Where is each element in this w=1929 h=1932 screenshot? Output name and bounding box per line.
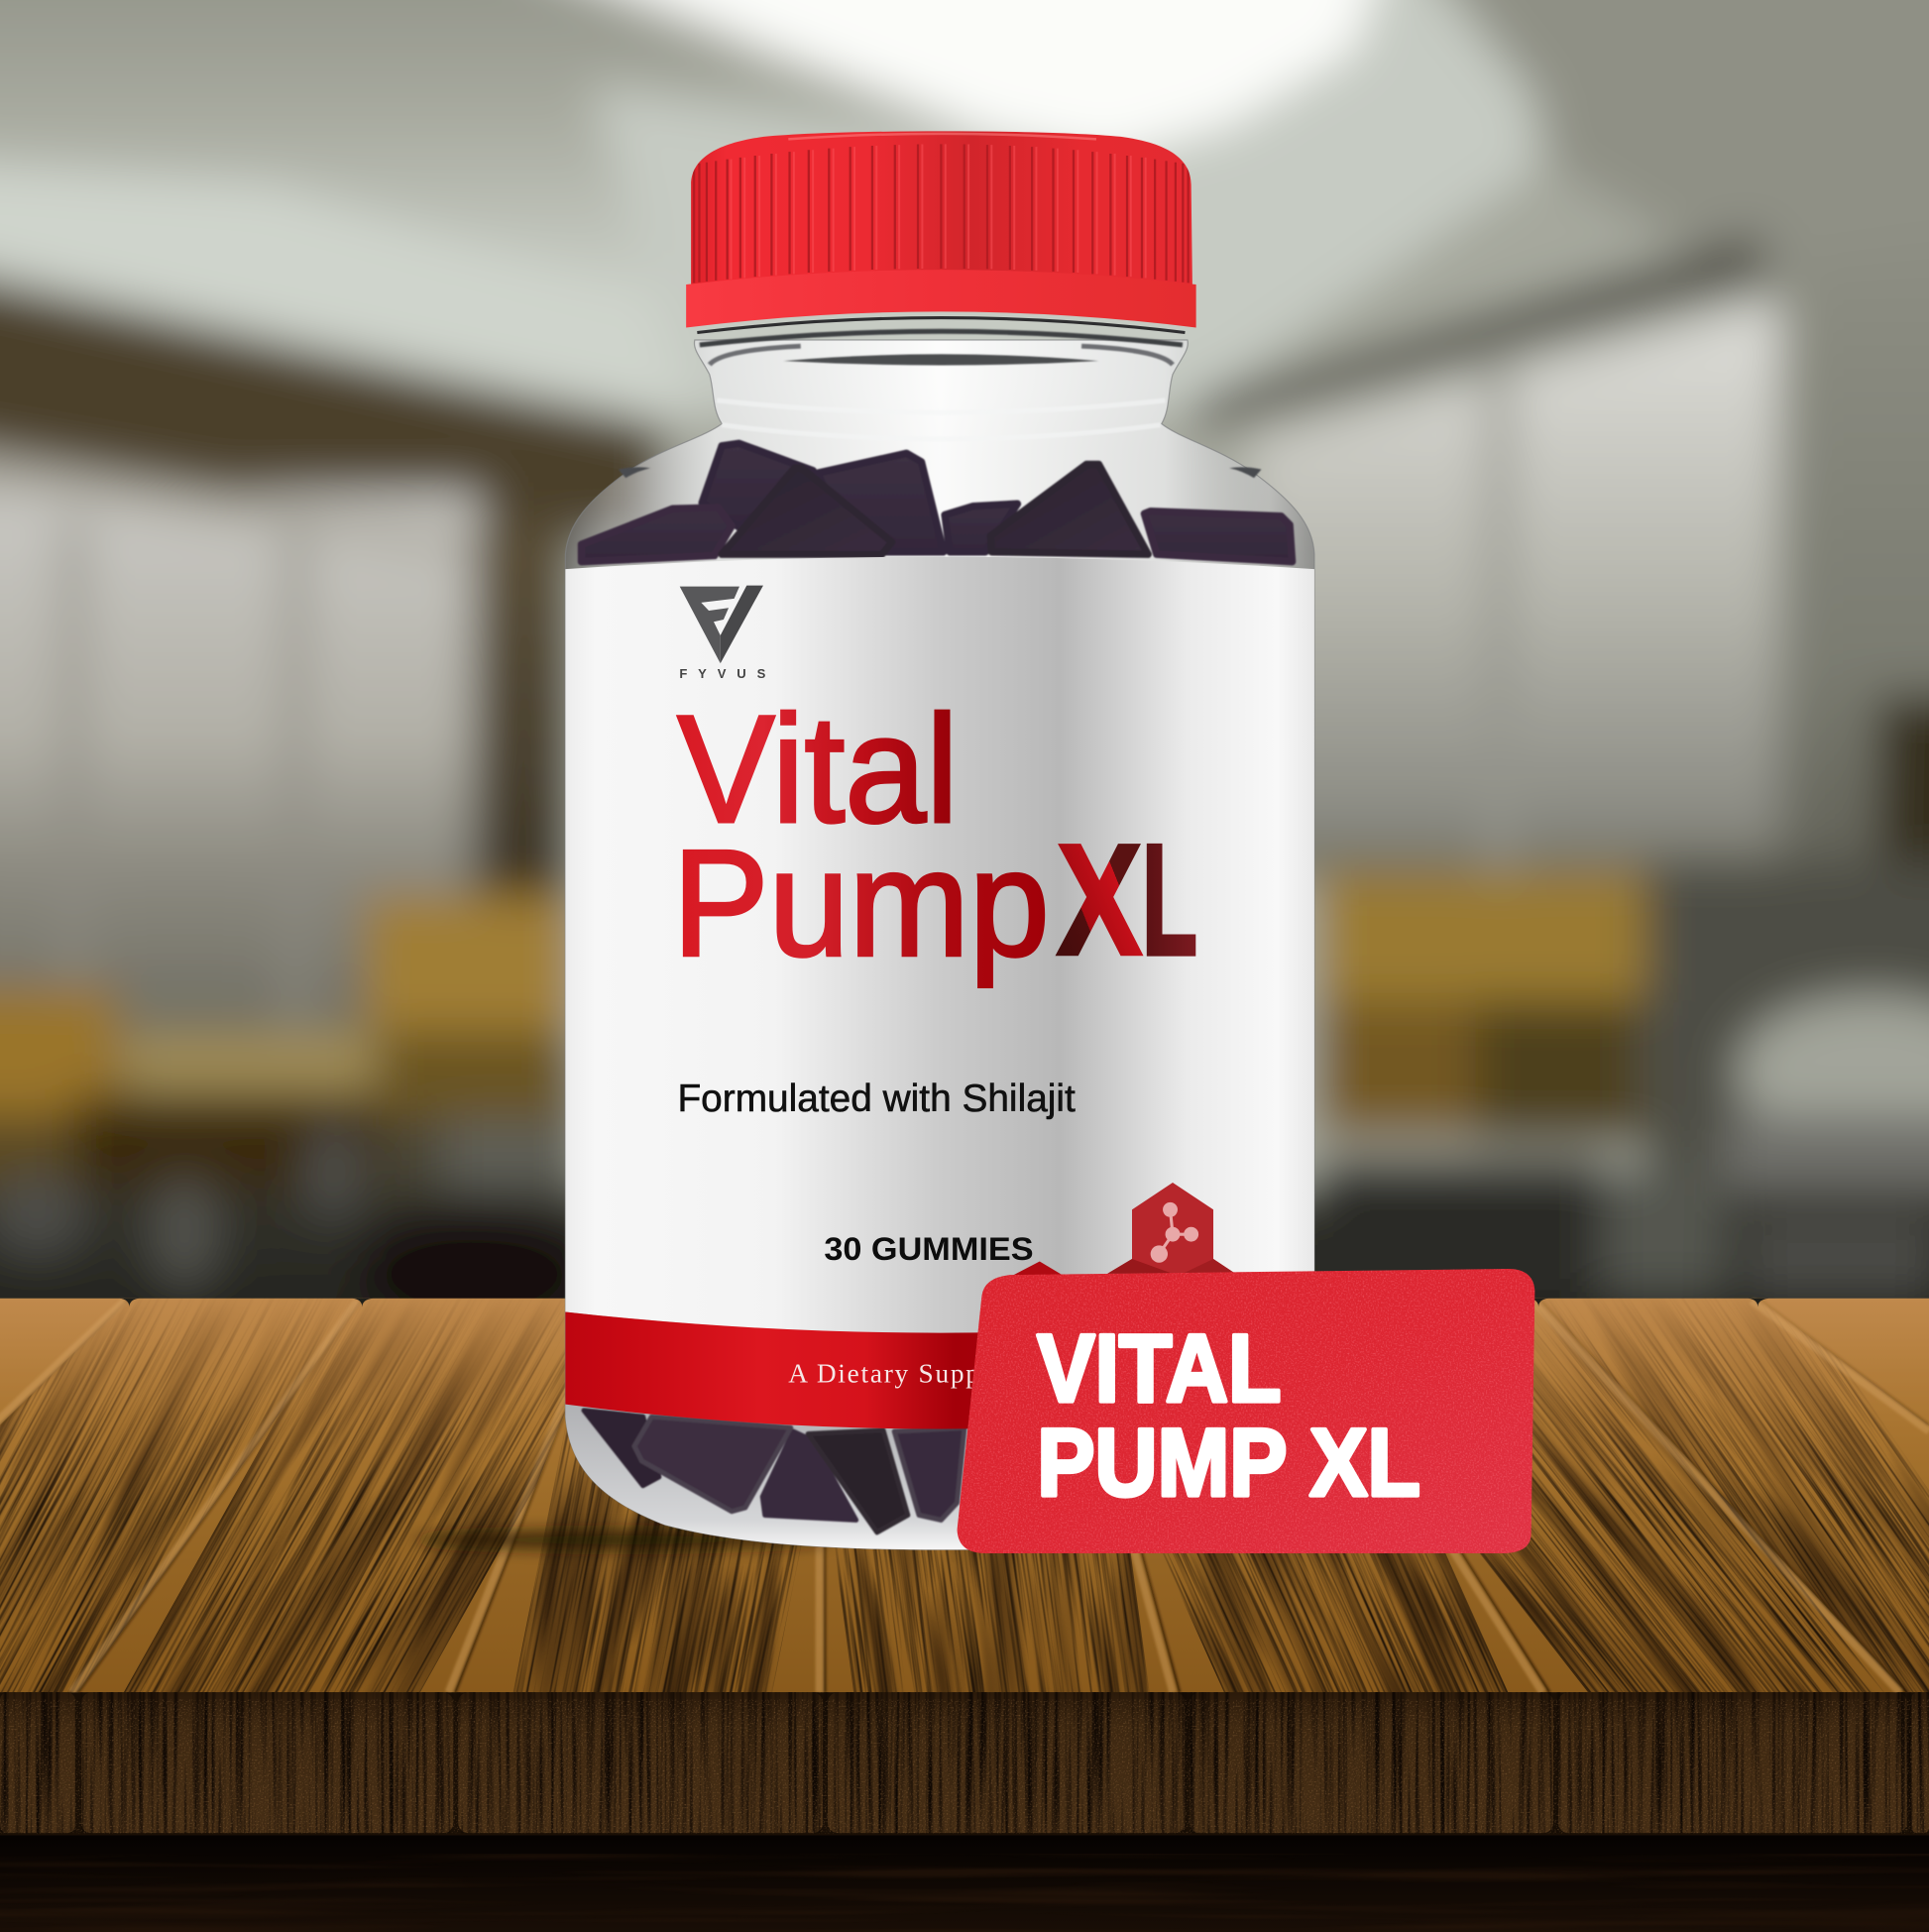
product card: Vital Pump XL: [958, 1269, 1534, 1553]
product bottle: [565, 131, 1314, 1549]
gummies: lower group: [584, 1411, 964, 1533]
background: blurred interior room: [0, 0, 1929, 1386]
label: white panel: [565, 557, 1314, 1333]
cap: red screw lid: [686, 131, 1196, 333]
title: Pump XL: X: [1057, 811, 1142, 987]
table top planks: [0, 1299, 1929, 1692]
gummies: upper group: [582, 443, 1293, 562]
title: Pump XL: Pump: [672, 820, 1050, 988]
table underside: [0, 1836, 1929, 1932]
tagline: Formulated with Shilajit: Formulated with Shilajit: [677, 1078, 1076, 1120]
label: red band: [565, 1311, 1314, 1428]
title: Pump XL: L: [1142, 811, 1197, 987]
title: Vital: Vital: [677, 684, 959, 854]
logo mark: FYVUS: FYVUS: [679, 666, 766, 681]
count: 30 GUMMIES: 30 GUMMIES: [824, 1231, 1034, 1267]
glass jar: [565, 331, 1314, 1549]
table front edge: [0, 1692, 1929, 1836]
wooden table: [0, 1299, 1929, 1932]
bottle cast shadow: [412, 1530, 832, 1549]
card text: VITAL: VITAL: [1037, 1314, 1281, 1422]
logo mark: FYVUS: [679, 586, 766, 681]
icon: molecule hexagons: [1011, 1183, 1235, 1276]
band text: A Dietary Supplement: A Dietary Supplement: [788, 1358, 1065, 1388]
card text: PUMP XL: PUMP XL: [1037, 1409, 1420, 1517]
